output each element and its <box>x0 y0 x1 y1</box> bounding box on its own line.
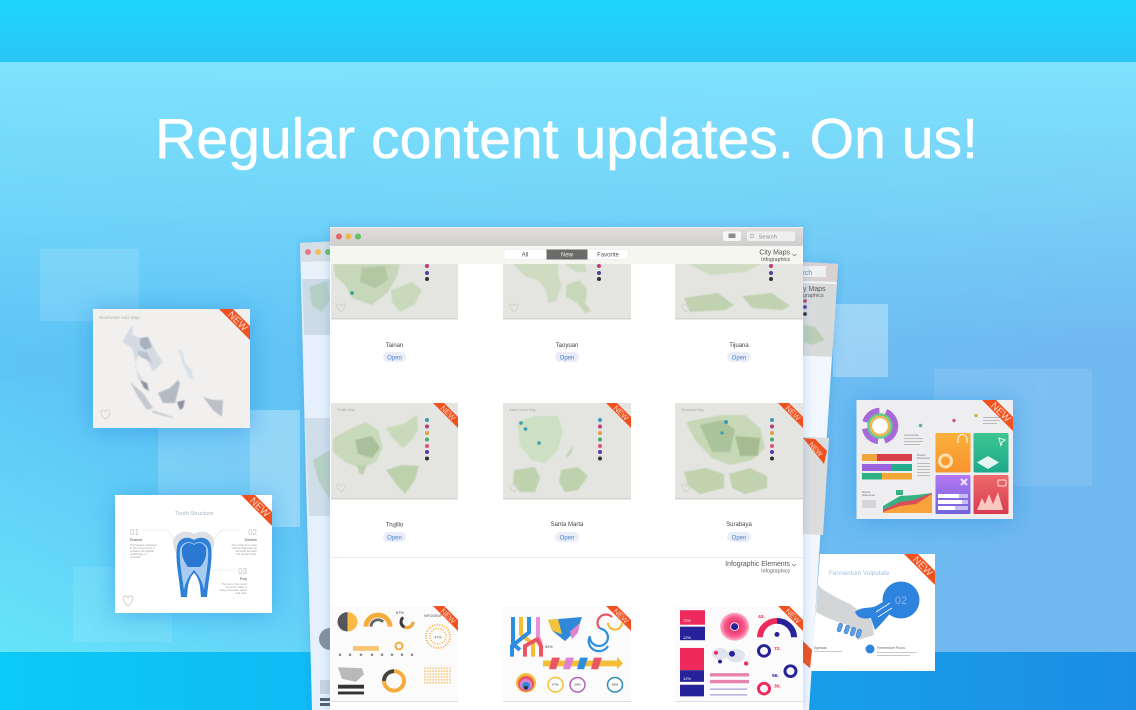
card: Fermentum Vulputate <box>811 554 935 671</box>
tooth labels right: One of the four major <box>232 543 257 547</box>
section divider <box>330 556 803 559</box>
card: Tooth Structure <box>115 495 272 613</box>
tooth labels left: 01 <box>130 528 139 537</box>
segmented control: All <box>522 252 528 258</box>
label: Tainan: Open <box>387 356 402 362</box>
search field <box>790 266 826 277</box>
icon: heart <box>101 410 110 419</box>
section label: City Maps: Infographics <box>761 257 790 263</box>
section label: City Maps: City Maps <box>759 250 791 256</box>
segmented control: Favorite <box>597 252 619 258</box>
card: dashboard infographic <box>856 400 1013 519</box>
world map <box>712 648 750 666</box>
section heading: Infographic Elements: Infographics <box>761 568 790 574</box>
blue circle <box>882 582 920 618</box>
label: Santa Marta: Open <box>560 536 574 542</box>
map panel <box>770 282 837 357</box>
title bar <box>300 241 340 262</box>
legend item: Fermentum Purus <box>877 646 905 650</box>
US map <box>338 667 364 682</box>
row 2: Trujillo card <box>331 403 458 500</box>
row 3: infographic thumbnail C <box>675 606 803 702</box>
thumbnail artwork: 30. <box>774 684 782 690</box>
ribbon: NEW <box>241 495 272 526</box>
tile values <box>683 618 691 681</box>
section label <box>803 286 826 299</box>
tile: green <box>974 433 1008 472</box>
label: Tainan: Tainan <box>386 343 403 349</box>
thumbnail artwork: 67% <box>552 683 559 687</box>
thumbnail artwork <box>512 615 623 692</box>
ribbon: NEW: NEW <box>807 441 824 458</box>
back window: right: Search <box>790 270 812 277</box>
tooth labels right <box>220 528 258 595</box>
ribbon: NEW: NEW <box>612 607 631 626</box>
ribbon: NEW: NEW <box>784 607 803 626</box>
ring <box>401 616 413 628</box>
back window: left <box>300 241 340 710</box>
thumbnail artwork: 96% <box>612 683 618 687</box>
gauge <box>760 621 794 637</box>
card: Fermentum Vulputate: 02 <box>895 595 907 607</box>
tooth labels right: and cells. <box>236 591 247 595</box>
segmented control: New <box>561 252 574 258</box>
S curves <box>589 615 622 651</box>
thumbnail artwork: 54% <box>545 645 553 649</box>
lower map panel <box>770 435 829 535</box>
bottom band <box>0 652 1136 710</box>
row 1: Tijuana card <box>675 264 803 320</box>
label: Taoyuan <box>555 343 579 362</box>
side text: Maecenas <box>862 493 876 497</box>
card: Southeast Asia map <box>93 309 250 428</box>
thumbnail artwork <box>680 610 796 696</box>
row 1: Tainan card <box>331 264 458 320</box>
ribbon: NEW <box>982 400 1013 431</box>
tooth illustration <box>173 532 214 597</box>
donut <box>384 671 404 691</box>
tile: orange <box>936 433 970 472</box>
card heading: Southeast Asia Map <box>99 315 140 320</box>
robot hand <box>837 597 895 638</box>
sunburst <box>426 625 450 648</box>
search field: Search <box>758 234 777 240</box>
small text stub <box>320 698 330 706</box>
radial target <box>720 613 749 641</box>
thumbnail artwork: 67% <box>396 610 404 615</box>
translucent background squares <box>40 249 1092 642</box>
thumbnail artwork <box>338 610 451 694</box>
ribbon: NEW: NEW <box>225 310 250 334</box>
title bar <box>770 260 838 282</box>
map dots <box>919 414 978 427</box>
side text: Maecenas <box>917 456 931 460</box>
thumbnail artwork: 47% <box>434 635 442 639</box>
title bar <box>330 228 803 246</box>
row 3: infographic thumbnail A <box>331 606 458 702</box>
thumbnail upper <box>302 279 340 335</box>
ribbon: NEW: NEW <box>439 607 458 626</box>
pie fragment <box>319 628 330 650</box>
label: Trujillo: Trujillo <box>386 522 404 528</box>
speech icons <box>758 646 796 694</box>
tooth labels right: Dentine <box>245 538 257 542</box>
label: Tijuana: Open <box>732 356 746 362</box>
label: Santa Marta: Santa Marta <box>551 522 584 528</box>
arrow ribbons <box>543 657 623 669</box>
ribbon: NEW <box>219 309 250 340</box>
row 2: Santa Marta card <box>503 403 631 500</box>
tooth labels right: the dental crown. <box>237 552 257 556</box>
main window <box>330 227 803 710</box>
ribbon: NEW: NEW <box>910 555 935 579</box>
icon: heart <box>123 596 133 606</box>
radial chart <box>865 411 895 441</box>
label: Taoyuan: Open <box>560 356 574 362</box>
tooth labels right: The part in the center <box>221 582 247 586</box>
tooth labels right: of a tooth made of <box>225 585 247 589</box>
ribbon: NEW: NEW <box>988 401 1013 425</box>
label: Taoyuan: Taoyuan <box>556 343 578 349</box>
card heading: Fermentum Vulputate <box>829 570 890 577</box>
pins <box>803 299 807 316</box>
row 2: Surabaya card <box>675 403 803 500</box>
section heading: Infographic Elements: Infographic Elements <box>725 561 791 568</box>
thumbnail artwork: 72. <box>774 646 782 652</box>
map of Southeast Asia <box>122 325 223 418</box>
toolbar <box>301 261 340 279</box>
thumbnail middle <box>305 418 340 516</box>
chat button <box>723 232 741 241</box>
tile: red <box>974 475 1008 514</box>
tooth labels left: contains the highest <box>130 549 154 553</box>
tile values: 72% <box>683 618 691 623</box>
label: Surabaya: Open <box>732 536 746 542</box>
section label: y Maps <box>803 286 826 293</box>
tooth labels left: in the human body. It <box>130 546 155 550</box>
tooth labels left <box>130 528 158 559</box>
area chart <box>883 490 932 513</box>
traffic lights <box>336 234 361 240</box>
top band <box>0 0 1136 62</box>
tooth labels left: Enamel <box>130 538 142 542</box>
ribbon: back window lower NEW <box>800 640 812 668</box>
leader lines <box>142 530 240 570</box>
pipes <box>512 617 541 657</box>
US map <box>548 617 582 641</box>
percent rings <box>548 677 622 692</box>
concentric circles <box>516 673 536 692</box>
thumbnail artwork: 56. <box>772 673 780 679</box>
legend item: Egestas <box>814 646 827 650</box>
tooth labels right: 02 <box>248 528 258 537</box>
thumbnail artwork: 43. <box>758 614 766 620</box>
label: Tijuana <box>727 343 751 362</box>
thumbnail artwork: INFOGRAP <box>424 614 443 618</box>
side text: Consectetur <box>904 433 919 437</box>
bars <box>353 646 379 651</box>
traffic lights <box>305 249 331 255</box>
section label: City Maps <box>759 250 796 263</box>
small icon <box>320 680 330 694</box>
tile values: 12% <box>683 635 691 640</box>
label: Trujillo <box>383 522 406 542</box>
ribbon: NEW: NEW <box>247 496 272 520</box>
label: Trujillo: Open <box>387 536 402 542</box>
ribbon: NEW: NEW <box>439 404 458 423</box>
ribbon: NEW: NEW <box>612 404 631 423</box>
card heading: Tooth Structure <box>175 511 214 517</box>
title: Regular content updates. On us! <box>155 107 978 171</box>
tooth labels right: tissues that make up <box>232 546 257 550</box>
tooth labels left: The hardest substance <box>130 543 158 547</box>
thumbnail artwork: 29% <box>574 683 581 687</box>
search field <box>747 232 795 241</box>
tooth labels right: Pulp <box>240 577 247 581</box>
side text <box>862 417 1000 508</box>
tooth labels right: the tooth and also <box>236 549 257 553</box>
segmented control <box>504 250 628 260</box>
row 2: Surabaya card: Surabaya Map <box>681 408 704 412</box>
colored ribbons <box>862 454 912 480</box>
row 1: Taoyuan card <box>503 264 631 320</box>
tooth labels right: living connective tissue <box>220 588 247 592</box>
row 2: Santa Marta card: Santa Marta Map <box>509 408 536 412</box>
row 3: infographic thumbnail B <box>503 606 631 702</box>
tile values: 12% <box>683 676 691 681</box>
ribbon: NEW: NEW <box>784 404 803 423</box>
dot grid <box>424 668 451 683</box>
back window: right <box>770 260 838 710</box>
pie <box>338 612 358 631</box>
tooth labels left: minerals. <box>130 555 141 559</box>
gauge <box>366 615 390 627</box>
tiles <box>680 610 705 696</box>
label: Tijuana: Tijuana <box>729 343 749 349</box>
label: Surabaya: Surabaya <box>726 522 753 528</box>
label: Surabaya <box>726 522 753 542</box>
section label: graphics <box>803 293 824 299</box>
tooth labels left: percentage of <box>130 552 147 556</box>
section heading: Infographic Elements <box>725 561 796 574</box>
label: Tainan <box>383 343 406 362</box>
ribbon: NEW <box>803 438 827 464</box>
label: Santa Marta <box>551 522 584 542</box>
side text: Mauris <box>917 453 926 457</box>
bars <box>710 673 749 695</box>
toolbar <box>330 246 803 264</box>
gray hand <box>816 585 874 640</box>
row 2: Trujillo card: Trujillo Map <box>337 408 355 412</box>
tile: purple <box>936 475 970 514</box>
side text: Mauris <box>862 490 871 494</box>
tooth labels right: 03 <box>238 567 248 576</box>
